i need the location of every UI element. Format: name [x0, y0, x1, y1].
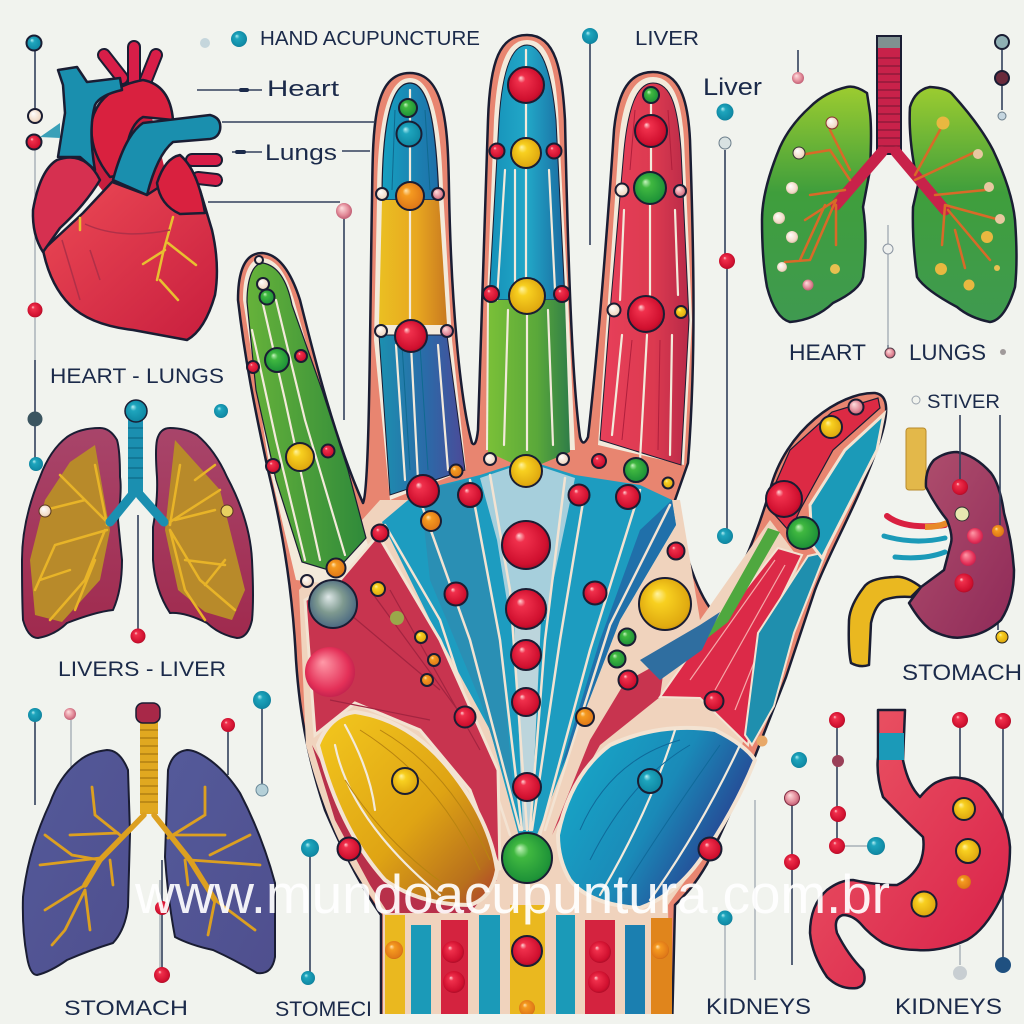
red vessel: [887, 516, 945, 526]
palm base: [299, 500, 800, 1014]
yellow branches: [35, 465, 235, 620]
yellow trachea ribs: [140, 730, 158, 802]
panel: thumb tip blue: [810, 414, 884, 558]
left lobe: [22, 428, 122, 638]
lung nodes: [773, 116, 1005, 290]
teal vessels: [884, 536, 945, 558]
panel: middle finger: [486, 40, 575, 470]
brown lungs nodes: [39, 505, 51, 517]
left lobe: [23, 750, 130, 975]
label: livers liver: LIVERS - LIVER: [58, 658, 226, 681]
label: connector lines: [197, 90, 375, 202]
panel: thumb tip red: [766, 398, 880, 532]
panel: thumb base red fan: [660, 548, 802, 745]
title: HAND ACUPUNCTURE: [260, 28, 480, 50]
label: connector dots: [237, 90, 247, 152]
heart small blue branch: [40, 123, 60, 138]
right lobe: [910, 87, 1016, 322]
label: heart right: HEART: [789, 340, 866, 365]
watermark: www.mundoacupuntura.com.br: [134, 863, 890, 925]
heart right atrium: [157, 155, 205, 214]
label: stomach right: STOMACH: [902, 660, 1022, 685]
panel: thumb base dark-blue strands: [640, 612, 720, 680]
heart underlay: [90, 110, 170, 200]
blue trachea cap: [125, 400, 147, 422]
label: lungs right: LUNGS: [909, 340, 986, 365]
stomach body: [810, 710, 1010, 988]
brown lungs right node: [221, 505, 233, 517]
yellow ureter: [849, 577, 921, 666]
label: stomeci: STOMECI: [275, 998, 372, 1021]
panel: palm meridian fan: [382, 460, 676, 840]
label: liver top: LIVER: [635, 28, 699, 50]
label: liver right: Liver: [703, 74, 762, 101]
hand: [238, 35, 886, 1024]
right lobe: [165, 750, 275, 973]
yellow branches: [85, 815, 215, 900]
acupuncture points on the hand: [247, 67, 864, 1016]
label: stomach left: STOMACH: [64, 997, 188, 1020]
hand silhouette: [238, 35, 886, 1024]
organ: purple lungs: [23, 703, 275, 975]
trachea: [877, 36, 901, 154]
kidney body: [909, 452, 1014, 638]
label: lungs: Lungs: [265, 140, 337, 165]
organ: heart: [33, 47, 220, 340]
yellow trachea: [140, 722, 158, 814]
panel: thumb base green strip: [705, 528, 780, 640]
stomach points: [912, 798, 980, 916]
organ: green lungs: [762, 36, 1016, 322]
left lobe: [762, 87, 871, 322]
trachea cap: [878, 37, 900, 48]
heart left atrium: [33, 158, 100, 252]
yellow cylinder: [906, 428, 926, 490]
right ochre tissue: [165, 440, 245, 620]
blue trachea: [128, 415, 143, 495]
panel: ring finger: [374, 78, 466, 500]
panel: yellow thenar oval: [318, 712, 497, 905]
kidney leader line: [960, 415, 1000, 525]
label: heart lungs left: HEART - LUNGS: [50, 365, 224, 388]
panel: left palm red zone: [305, 535, 500, 870]
heart aortic arch: [91, 80, 173, 177]
panel: thumb base blue strip: [745, 552, 826, 745]
panel: right palm red zone: [552, 660, 665, 835]
label: kidneys one: KIDNEYS: [706, 994, 811, 1019]
panel: index finger: [598, 77, 692, 465]
heart pulmonary trunk: [113, 115, 220, 195]
heart blue superior vena cava: [58, 67, 122, 170]
panel: wrist stripes: [385, 905, 672, 1014]
panel: blue hypothenar oval: [558, 728, 755, 908]
label: kidneys two: KIDNEYS: [895, 994, 1002, 1019]
panel: lower-left palm red edge: [312, 745, 497, 913]
right lobe: [153, 428, 253, 638]
organ: kidney: [849, 396, 1014, 666]
panel: pinky finger: [243, 258, 368, 585]
bronchi: [836, 152, 945, 210]
left ochre tissue: [30, 445, 110, 622]
heart coronary vessels: [80, 217, 196, 300]
organ: brown lungs: [22, 400, 253, 638]
trachea ribs: [878, 58, 900, 146]
blue bronchi: [110, 495, 164, 522]
mask below the wrist: [375, 1014, 685, 1024]
heart vessels red: [104, 47, 216, 180]
label: stiver: STIVER: [927, 392, 1000, 413]
label: heart: Heart: [267, 76, 339, 101]
red trachea cap: [136, 703, 160, 723]
esophagus band: [879, 733, 904, 760]
organ: stomach: [810, 710, 1010, 988]
teal trachea ribs: [128, 428, 143, 478]
heart body: [43, 180, 217, 340]
orange vessel end: [925, 523, 947, 527]
lung branches: [785, 130, 1000, 268]
kidney points: [912, 396, 1008, 643]
